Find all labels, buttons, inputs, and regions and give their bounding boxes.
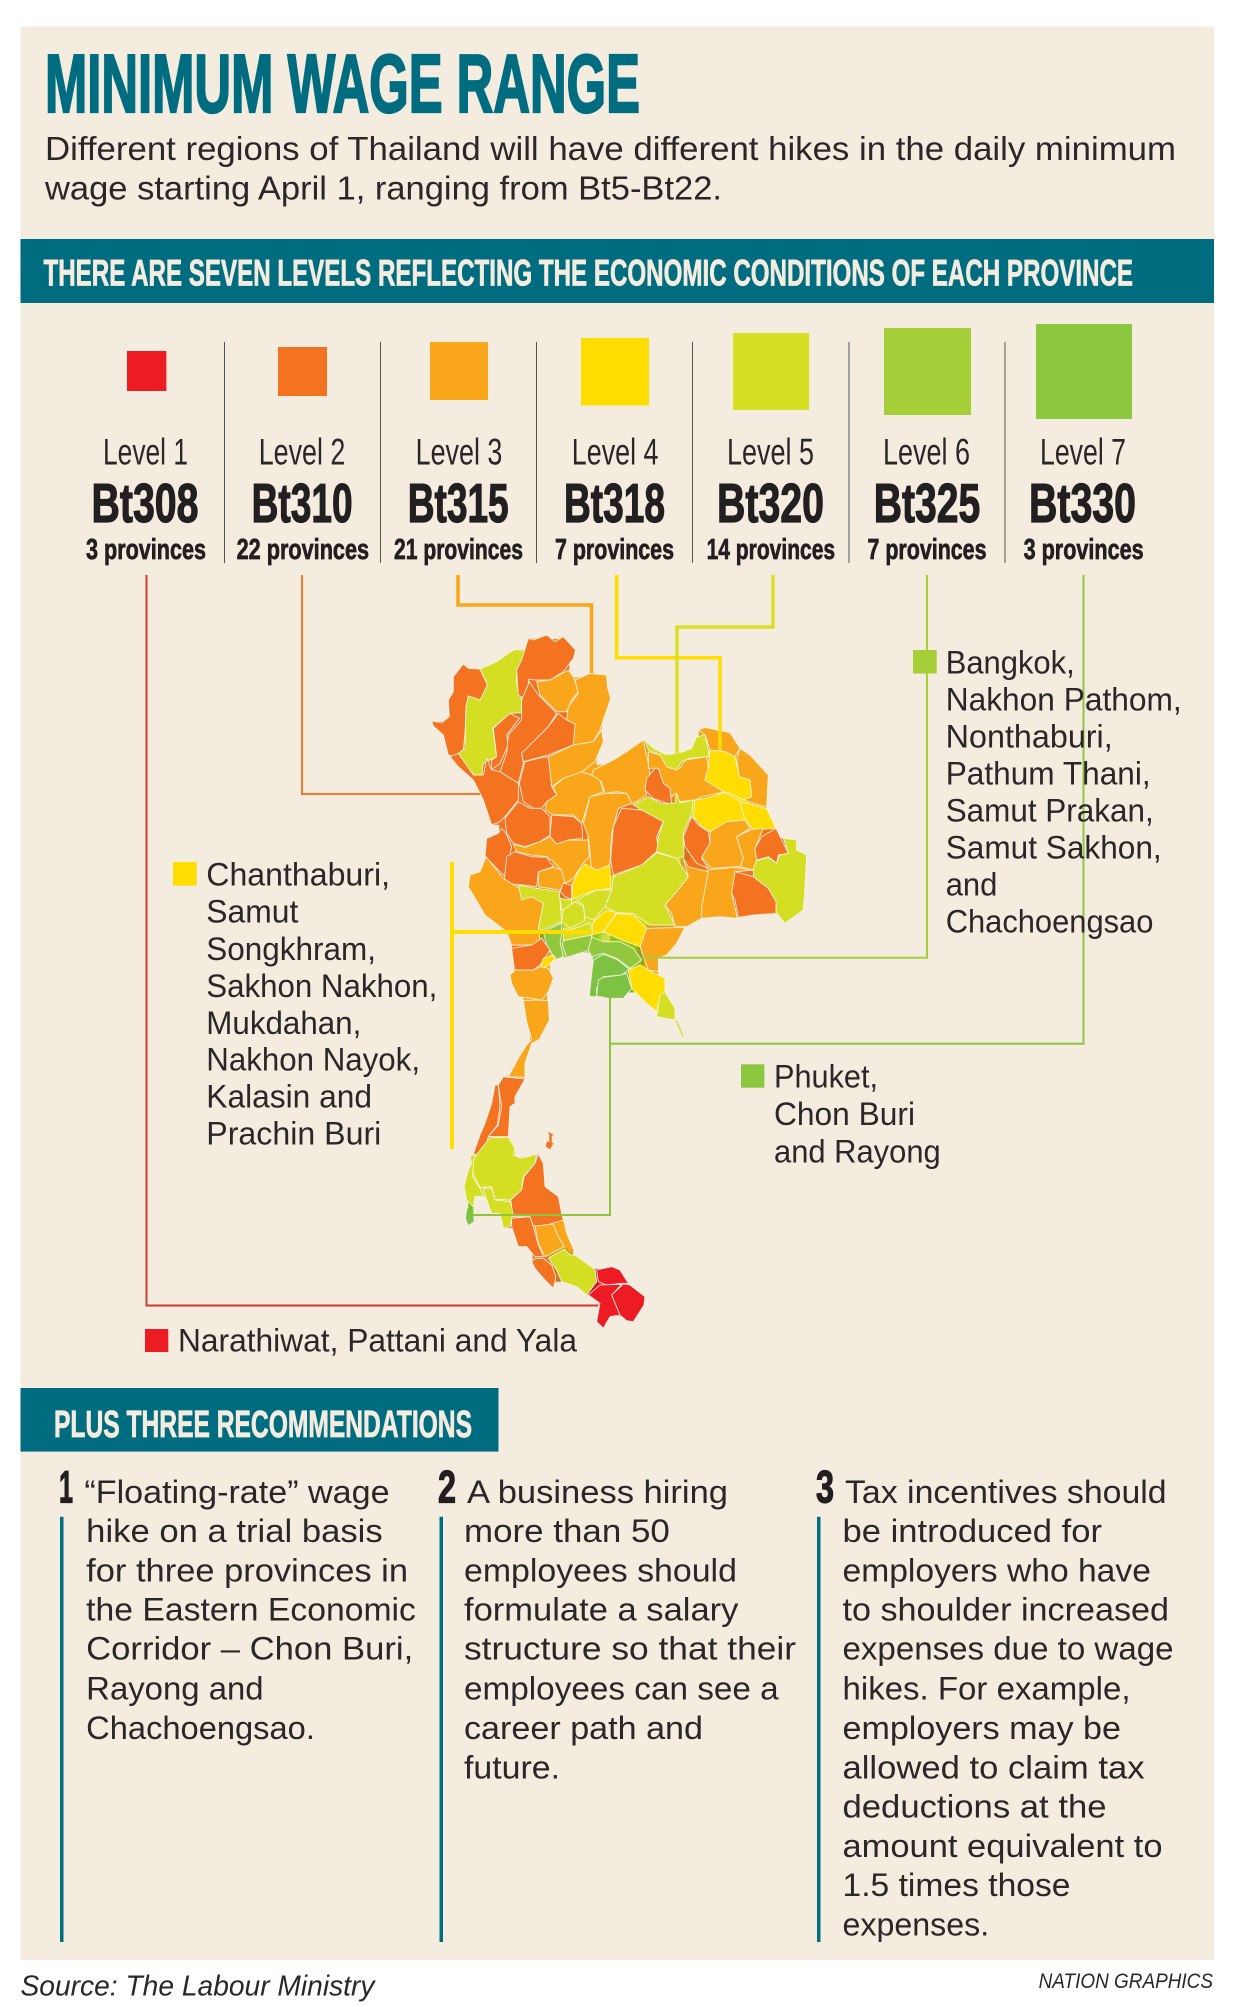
legend: level 4 provinces: Samut — [206, 894, 298, 930]
legend: level 1 provinces: Narathiwat, Pattani and Yala — [178, 1323, 577, 1359]
recommendation 3: expenses due to wage — [842, 1631, 1174, 1667]
legend: level 6 provinces — [913, 644, 1182, 940]
map: southern provinces — [464, 1000, 645, 1328]
recommendation 2 — [438, 1461, 796, 1942]
recommendation 1: Rayong and — [86, 1671, 264, 1707]
legend: level 6 provinces: Nonthaburi, — [946, 719, 1113, 755]
connector: level 7 to map — [610, 575, 1084, 1044]
level 5: Level 5 — [727, 432, 814, 472]
recommendation 3: Tax incentives should — [845, 1474, 1167, 1510]
connector: level 3 to map — [458, 575, 592, 673]
connector: level 7 branch to Phuket — [472, 997, 610, 1215]
recommendation 1: hike on a trial basis — [86, 1513, 383, 1549]
recommendation 3: amount equivalent to — [842, 1828, 1162, 1864]
level 1: 3 provinces — [86, 534, 206, 566]
intro text — [44, 130, 1176, 207]
title: MINIMUM WAGE RANGE — [45, 37, 640, 130]
connector: level 6 to map — [642, 575, 927, 958]
level 5: 14 provinces — [707, 534, 835, 566]
level 3: Bt315 — [408, 472, 509, 534]
level 2: Level 2 — [259, 432, 345, 472]
intro text: wage starting April 1, ranging from Bt5-Bt22. — [44, 170, 722, 207]
recommendation 1: “Floating-rate” wage — [84, 1474, 390, 1510]
section banner: seven levels — [20, 239, 1214, 303]
level 7 — [1024, 324, 1144, 566]
section banner: recommendations: PLUS THREE RECOMMENDATIONS — [54, 1404, 472, 1446]
recommendation 3: employers who have — [842, 1552, 1151, 1588]
legend: level 7 provinces: Phuket, — [774, 1059, 878, 1095]
map of Thailand by wage level — [432, 635, 807, 1328]
level 6 — [868, 328, 986, 566]
connector: level 4 to map — [617, 575, 720, 750]
level 6: Level 6 — [883, 432, 970, 472]
legend: level 6 provinces: Chachoengsao — [946, 904, 1153, 940]
legend: level 6 provinces: Samut Prakan, — [946, 793, 1154, 829]
legend: level 6 provinces: Nakhon Pathom, — [946, 682, 1182, 718]
legend: level 6 provinces: and — [946, 867, 997, 903]
recommendation 3: hikes. For example, — [842, 1671, 1130, 1707]
legend: level 6 provinces: Samut Sakhon, — [946, 830, 1162, 866]
level 2: Bt310 — [252, 472, 353, 534]
section banner: recommendations — [20, 1388, 498, 1452]
legend: level 4 provinces: Songkhram, — [206, 931, 376, 967]
recommendation 2: A business hiring — [467, 1474, 728, 1510]
level 2 — [237, 347, 369, 566]
recommendation 1 — [59, 1461, 416, 1942]
recommendation 3: employers may be — [842, 1710, 1121, 1746]
level 3: 21 provinces — [394, 534, 523, 566]
level 4: Level 4 — [572, 432, 658, 472]
legend: level 6 provinces: Pathum Thani, — [946, 756, 1151, 792]
recommendation 3: be introduced for — [842, 1513, 1102, 1549]
legend: level 7 provinces — [741, 1059, 941, 1169]
level 3 — [394, 342, 523, 566]
legend: level 4 provinces: Sakhon Nakhon, — [206, 968, 437, 1004]
recommendation 3: expenses. — [842, 1906, 989, 1942]
recommendation 2: formulate a salary — [464, 1592, 738, 1628]
recommendation 3: to shoulder increased — [842, 1592, 1169, 1628]
level 7: 3 provinces — [1024, 534, 1144, 566]
level 4: Bt318 — [564, 472, 665, 534]
level 6: 7 provinces — [868, 534, 986, 566]
level 6: Bt325 — [874, 472, 980, 534]
map: north, northeast and central provinces — [432, 635, 807, 1037]
legend: level 4 provinces: Mukdahan, — [206, 1005, 361, 1041]
level 7: Level 7 — [1040, 432, 1126, 472]
legend: level 7 provinces: Chon Buri — [774, 1096, 915, 1132]
legend: level 4 provinces — [173, 857, 437, 1152]
level 5 — [707, 333, 835, 566]
recommendation 2: employees can see a — [464, 1671, 779, 1707]
connector: level 5 to map — [677, 575, 773, 753]
recommendation 1: 1 — [59, 1461, 73, 1512]
level 1 — [86, 351, 206, 566]
level 7: Bt330 — [1029, 472, 1136, 534]
legend: level 4 provinces: Nakhon Nayok, — [206, 1042, 420, 1078]
recommendation 2: employees should — [464, 1552, 737, 1588]
recommendation 1: Corridor – Chon Buri, — [86, 1631, 413, 1667]
recommendation 2: structure so that their — [464, 1631, 796, 1667]
recommendation 1: for three provinces in — [86, 1552, 408, 1588]
legend: level 6 provinces: Bangkok, — [946, 644, 1075, 680]
recommendation 3: deductions at the — [842, 1789, 1106, 1825]
level 4 — [555, 338, 674, 566]
level 5: Bt320 — [717, 472, 824, 534]
level 4: 7 provinces — [555, 534, 674, 566]
recommendation 3: 1.5 times those — [842, 1867, 1070, 1903]
recommendation 2: 2 — [438, 1461, 456, 1512]
credit: NATION GRAPHICS — [1039, 1970, 1213, 1993]
source: Source: The Labour Ministry — [20, 1971, 376, 2003]
legend: level 4 provinces: Prachin Buri — [206, 1116, 381, 1152]
recommendation 2: future. — [464, 1749, 560, 1785]
recommendation 1: the Eastern Economic — [86, 1592, 416, 1628]
legend: level 7 provinces: and Rayong — [774, 1133, 941, 1169]
recommendation 1: Chachoengsao. — [86, 1710, 315, 1746]
recommendation 2: more than 50 — [464, 1513, 670, 1549]
recommendation 2: career path and — [464, 1710, 703, 1746]
recommendation 3: allowed to claim tax — [842, 1749, 1144, 1785]
connector: level 2 to map — [302, 575, 480, 794]
legend: level 4 provinces: Chanthaburi, — [206, 857, 390, 893]
recommendation 3: 3 — [816, 1461, 834, 1512]
level 2: 22 provinces — [237, 534, 369, 566]
level 1: Bt308 — [92, 472, 198, 534]
level 3: Level 3 — [416, 432, 502, 472]
connector: level 4 legend bracket — [452, 862, 592, 1149]
intro text: Different regions of Thailand will have different hikes in the daily minimum — [45, 130, 1176, 167]
legend: level 4 provinces: Kalasin and — [206, 1079, 372, 1115]
connector: level 1 to Narathiwat, Pattani and Yala — [146, 575, 598, 1306]
recommendation 3 — [816, 1461, 1174, 1942]
level 1: Level 1 — [103, 432, 188, 472]
